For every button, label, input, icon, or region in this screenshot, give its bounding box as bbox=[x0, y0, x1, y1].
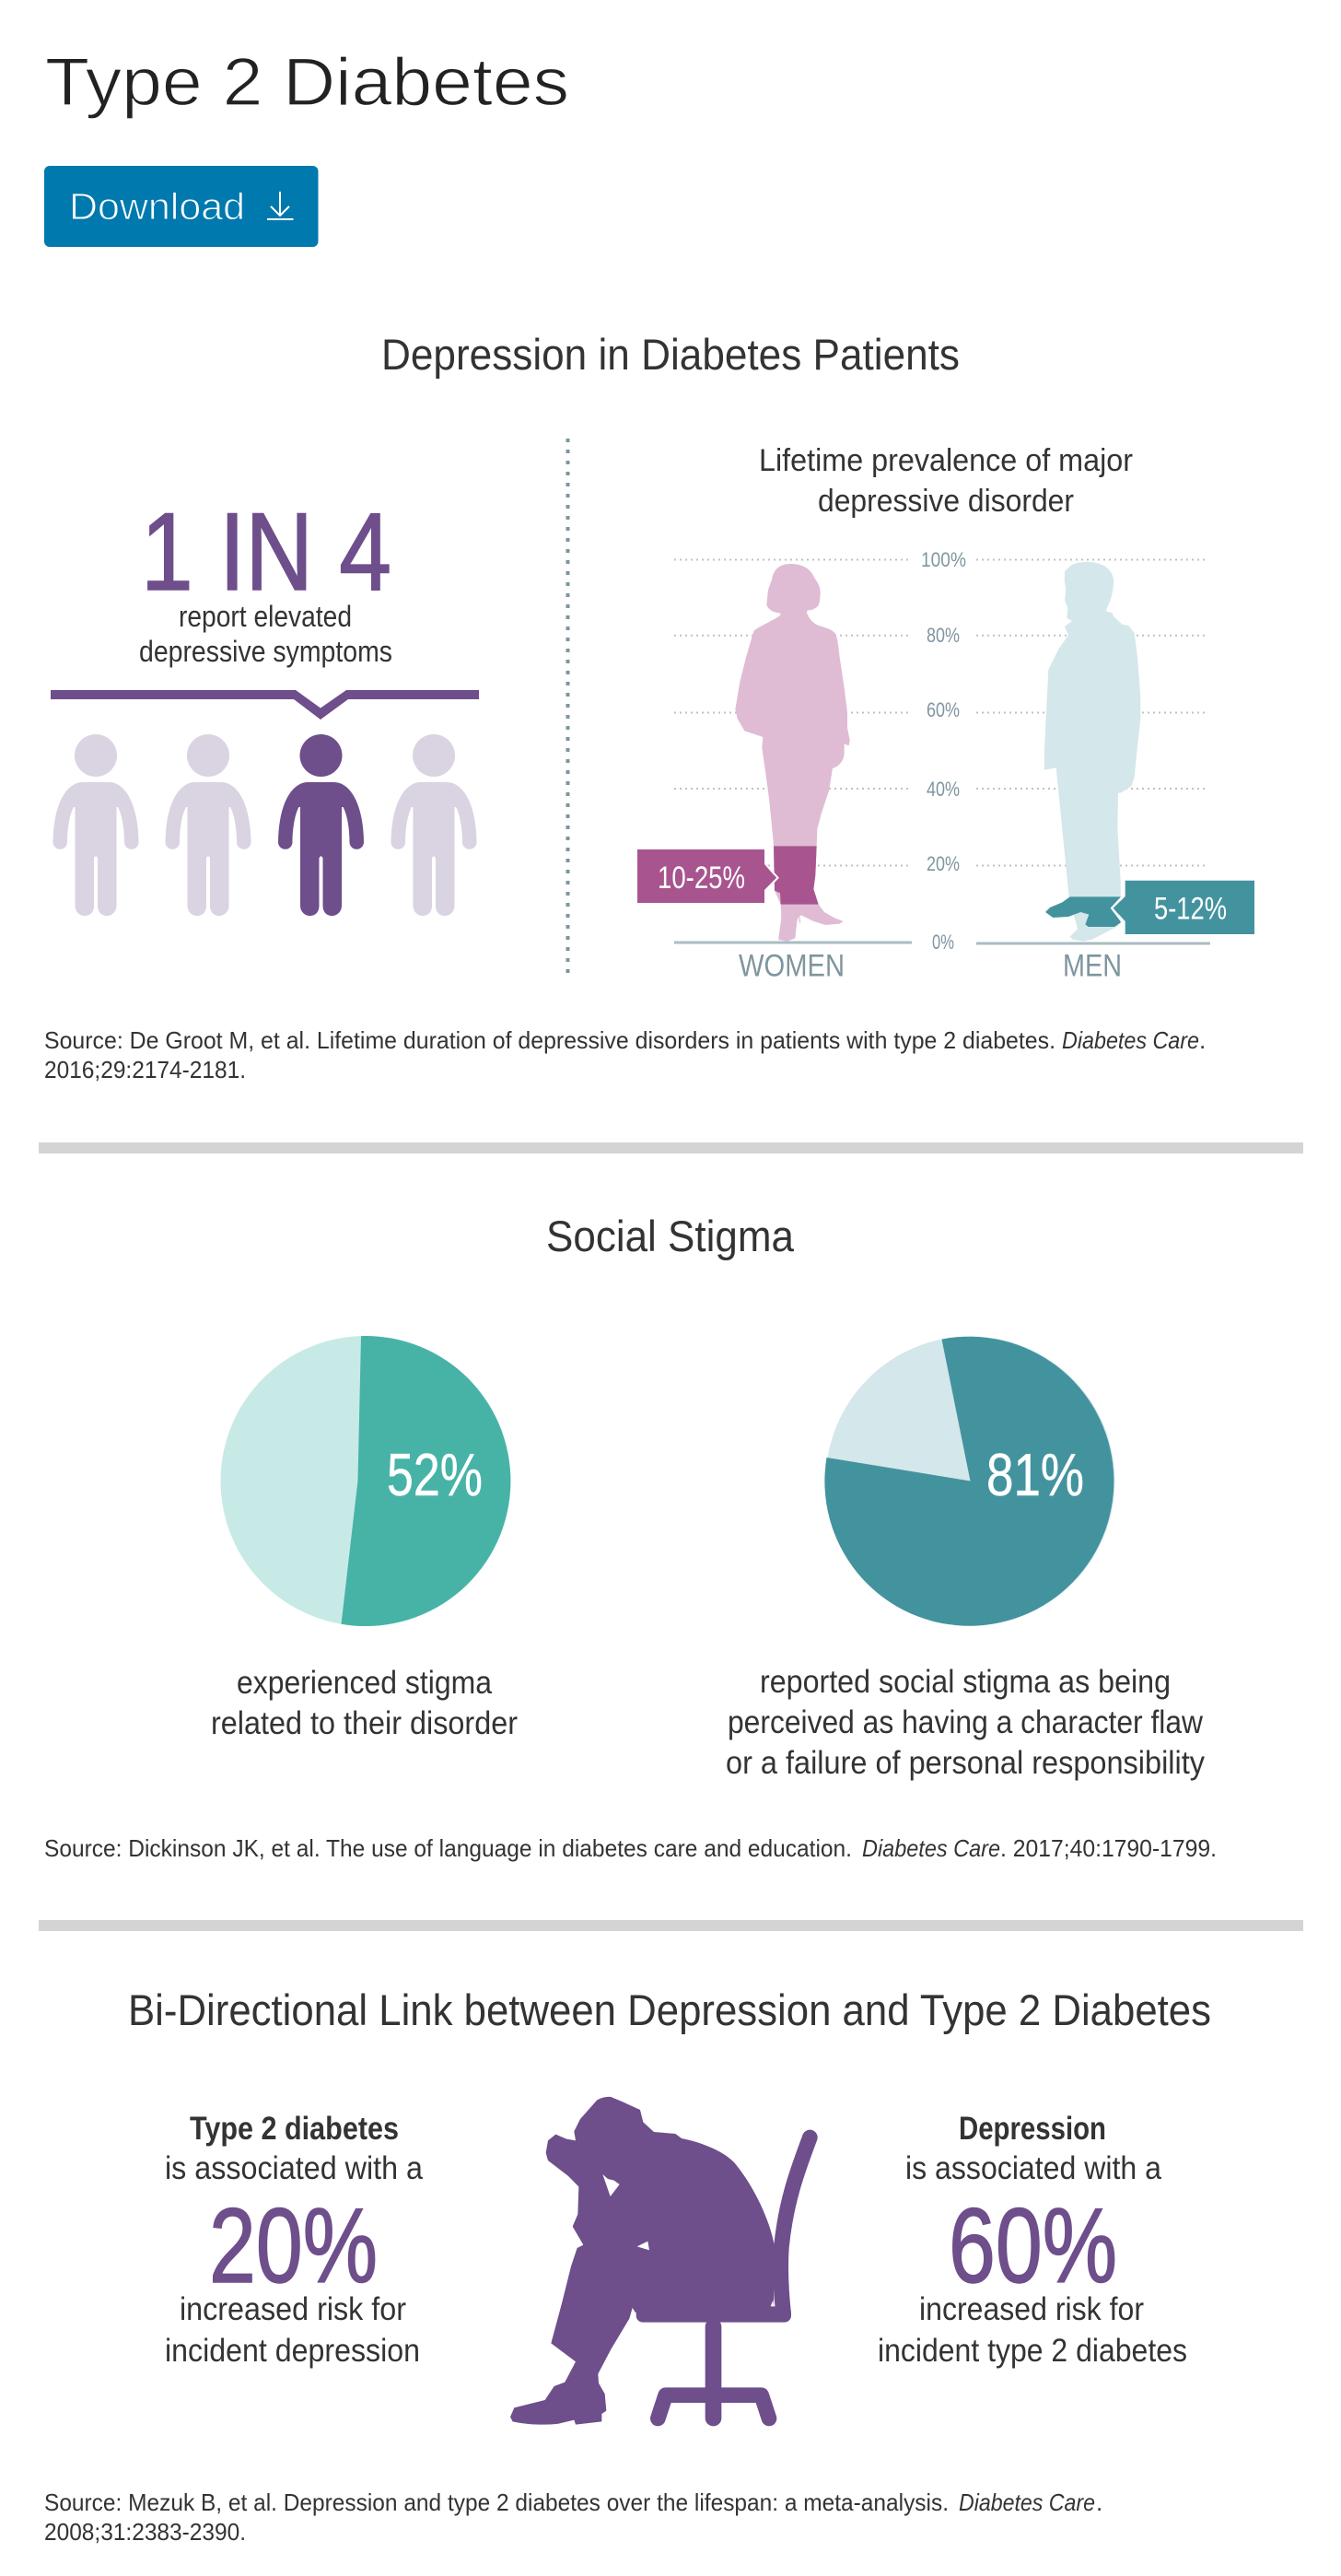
text: report elevated depressive symptoms bbox=[139, 600, 392, 668]
icon: person 2 bbox=[166, 734, 251, 916]
callout: women 10-25%: 10-25% bbox=[658, 861, 745, 896]
chart title: Lifetime prevalence of major bbox=[759, 443, 1133, 478]
stat block: depression 60% bbox=[878, 2111, 1187, 2369]
source 3: Diabetes Care bbox=[959, 2488, 1095, 2516]
pie chart: 81%: 81% bbox=[986, 1441, 1084, 1508]
source 1: Diabetes Care bbox=[1062, 1026, 1199, 1054]
axis labels: 80% bbox=[927, 624, 960, 647]
caption: reported social stigma bbox=[726, 1664, 1205, 1781]
axis labels: 40% bbox=[927, 778, 960, 801]
chart title bbox=[759, 443, 1133, 519]
bracket with pointer bbox=[51, 690, 479, 720]
icon: person 4 bbox=[391, 734, 477, 916]
axis labels: 100% bbox=[921, 548, 966, 571]
stat block: depression 60%: increased risk for bbox=[919, 2291, 1144, 2327]
source 1: . bbox=[1199, 1026, 1206, 1054]
stat block: type 2 diabetes 20%: increased risk for bbox=[180, 2291, 406, 2327]
caption: experienced stigma: related to their disorder bbox=[211, 1705, 518, 1741]
caption: reported social stigma: or a failure of personal responsibility bbox=[726, 1745, 1205, 1781]
stat block: type 2 diabetes 20%: is associated with a bbox=[165, 2150, 423, 2186]
download button bbox=[44, 166, 319, 247]
stat block: type 2 diabetes 20%: Type 2 diabetes bbox=[190, 2111, 399, 2147]
icon: person 3 highlighted bbox=[278, 734, 364, 916]
source 3: . bbox=[1096, 2488, 1102, 2516]
stat block: type 2 diabetes 20% bbox=[165, 2111, 423, 2369]
callout: women 10-25% bbox=[637, 849, 777, 903]
heading: bi-directional link: Bi-Directional Link between Depression and Type 2 Diabetes bbox=[128, 1985, 1211, 2034]
heading: depression: Depression in Diabetes Patients bbox=[381, 330, 960, 379]
source 1: Source: De Groot M, et al. Lifetime duration of depressive disorders in patients with type 2 diabetes. bbox=[44, 1026, 1055, 1054]
source 2: Diabetes Care bbox=[862, 1834, 1000, 1862]
icon: woman silhouette bbox=[735, 564, 850, 942]
stat block: type 2 diabetes 20%: incident depression bbox=[165, 2333, 420, 2369]
source 1 bbox=[44, 1026, 1206, 1083]
label: men: MEN bbox=[1063, 949, 1122, 984]
caption: experienced stigma: experienced stigma bbox=[237, 1665, 492, 1701]
callout: men 5-12%: 5-12% bbox=[1154, 892, 1227, 927]
icon: man silhouette bbox=[1044, 562, 1140, 942]
icon: people row bbox=[53, 734, 477, 916]
caption: reported social stigma: perceived as having a character flaw bbox=[728, 1704, 1204, 1740]
text: report elevated depressive symptoms: depressive symptoms bbox=[139, 635, 392, 668]
download button: Download bbox=[69, 185, 245, 228]
section rule 1 bbox=[39, 1142, 1303, 1153]
axis labels: 0% bbox=[932, 931, 954, 954]
stat block: type 2 diabetes 20%: 20% bbox=[209, 2187, 378, 2305]
callout: men 5-12% bbox=[1112, 881, 1254, 934]
icon: person 1 bbox=[53, 734, 138, 916]
axis labels: 20% bbox=[927, 852, 960, 875]
icon: depressed person on chair bbox=[510, 2097, 810, 2426]
stat: 1 in 4: 1 IN 4 bbox=[141, 490, 391, 614]
axis labels: 60% bbox=[927, 698, 960, 721]
source 1: 2016;29:2174-2181. bbox=[44, 1056, 246, 1083]
stat block: depression 60%: Depression bbox=[959, 2111, 1106, 2147]
chart title: depressive disorder bbox=[818, 484, 1074, 519]
source 3 bbox=[44, 2488, 1102, 2546]
text: report elevated depressive symptoms: report elevated bbox=[179, 600, 352, 633]
heading: social stigma: Social Stigma bbox=[546, 1212, 795, 1260]
stat block: depression 60%: incident type 2 diabetes bbox=[878, 2333, 1187, 2369]
stat block: depression 60%: is associated with a bbox=[905, 2150, 1161, 2186]
source 3: Source: Mezuk B, et al. Depression and type 2 diabetes over the lifespan: a meta-analysis. bbox=[44, 2488, 949, 2516]
caption: reported social stigma: reported social stigma as being bbox=[760, 1664, 1171, 1700]
icon: download arrow bbox=[267, 192, 293, 219]
caption: experienced stigma bbox=[211, 1665, 518, 1741]
pie chart: 52%: 52% bbox=[387, 1441, 483, 1508]
label: women: WOMEN bbox=[739, 949, 845, 984]
chart: lifetime prevalence silhouettes bbox=[637, 548, 1254, 984]
stat block: depression 60%: 60% bbox=[949, 2187, 1117, 2305]
pie chart: 81% bbox=[824, 1336, 1114, 1626]
panel: bi-directional link bbox=[44, 1985, 1211, 2546]
section rule 2 bbox=[39, 1920, 1303, 1931]
source 3: 2008;31:2383-2390. bbox=[44, 2518, 246, 2546]
title: Type 2 Diabetes bbox=[45, 45, 569, 120]
axis labels bbox=[921, 548, 966, 954]
pie chart: 52% bbox=[221, 1336, 510, 1626]
dotted divider bbox=[566, 439, 569, 978]
source 2: Source: Dickinson JK, et al. The use of language in diabetes care and education. bbox=[44, 1834, 852, 1862]
panel: social stigma bbox=[44, 1212, 1217, 1862]
source 2: . 2017;40:1790-1799. bbox=[1000, 1834, 1217, 1862]
